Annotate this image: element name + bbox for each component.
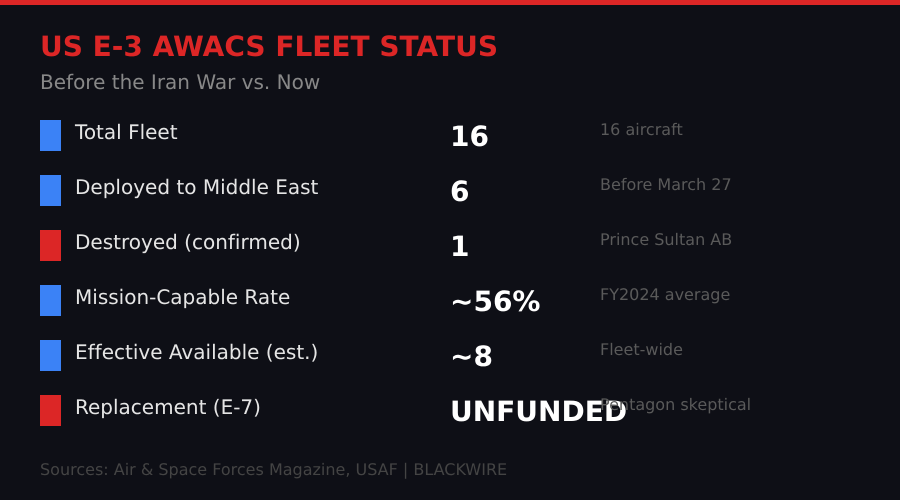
- row: total fleet: 16: [450, 120, 489, 153]
- row: effective available: ~8: [450, 340, 493, 373]
- sources footer: Sources: Air & Space Forces Magazine, USAF | BLACKWIRE: [40, 460, 507, 479]
- row: destroyed: [40, 230, 732, 263]
- row: replacement: UNFUNDED: [450, 395, 627, 428]
- row: effective available: Fleet-wide: [600, 340, 683, 359]
- row: deployed to middle east: Deployed to Middle East: [75, 175, 319, 199]
- row: total fleet: 16 aircraft: [600, 120, 683, 139]
- row: destroyed: Prince Sultan AB: [600, 230, 732, 249]
- row: replacement: [40, 395, 751, 428]
- row: replacement: Pentagon skeptical: [600, 395, 751, 414]
- row: replacement: Replacement (E-7): [75, 395, 261, 419]
- row: deployed to middle east: Before March 27: [600, 175, 732, 194]
- row: destroyed: 1: [450, 230, 469, 263]
- row: effective available: Effective Available (est.): [75, 340, 318, 364]
- top accent bar: [0, 0, 900, 5]
- row: mission-capable rate: ~56%: [450, 285, 540, 318]
- row: total fleet: [40, 120, 683, 153]
- row: mission-capable rate: FY2024 average: [600, 285, 730, 304]
- subtitle: Before the Iran War vs. Now: [40, 70, 320, 94]
- row: total fleet: Total Fleet: [74, 120, 178, 144]
- row: mission-capable rate: [40, 285, 730, 318]
- row: destroyed: Destroyed (confirmed): [75, 230, 301, 254]
- row: mission-capable rate: Mission-Capable Rate: [75, 285, 290, 309]
- row: deployed to middle east: 6: [450, 175, 469, 208]
- row: deployed to middle east: [40, 175, 732, 208]
- row: effective available: [40, 340, 683, 373]
- title: US E-3 AWACS FLEET STATUS: [40, 30, 498, 63]
